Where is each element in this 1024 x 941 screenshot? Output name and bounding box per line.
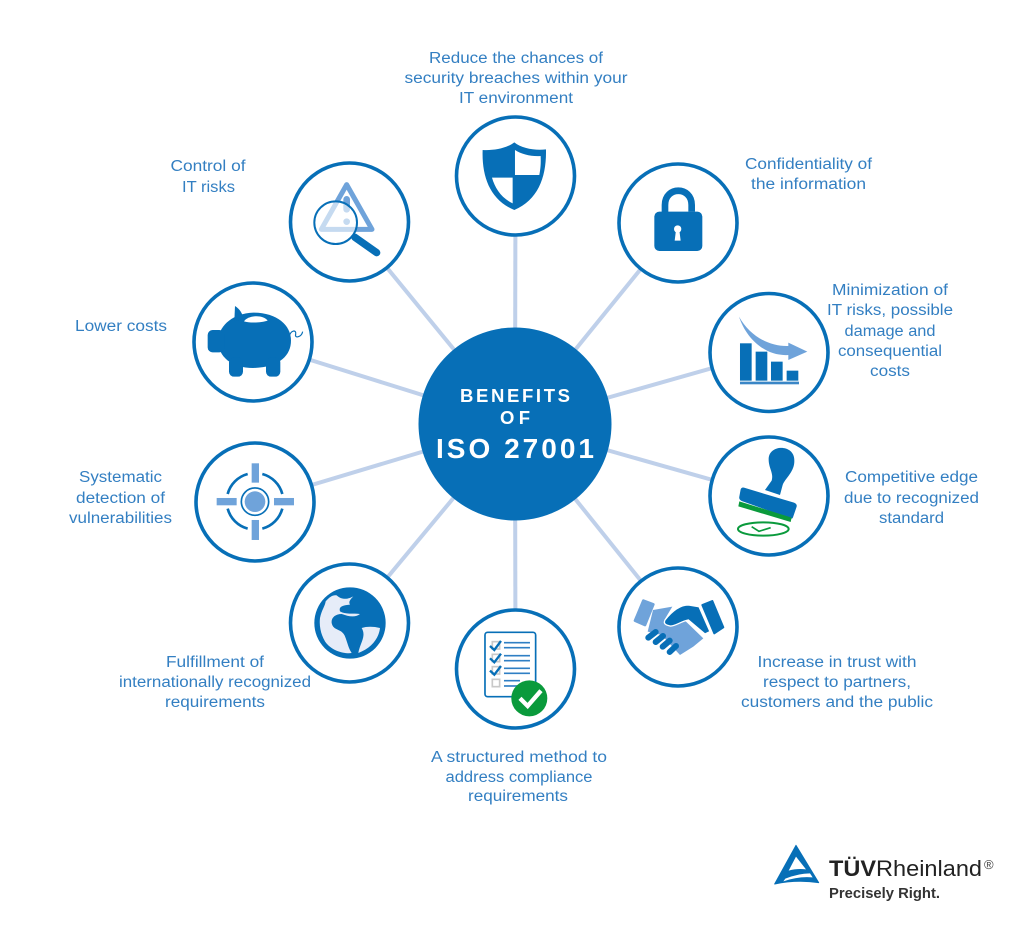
node: handshake icon [619, 568, 737, 686]
logo: TÜV Rheinland: ® [984, 857, 994, 872]
node: falling bar chart icon [710, 294, 828, 412]
label: minimization of IT risks: consequential [838, 343, 942, 360]
label: structured method: requirements [468, 788, 568, 805]
label: minimization of IT risks: Minimization of [832, 282, 949, 299]
label: competitive edge: due to recognized [844, 490, 979, 507]
logo: TÜV Rheinland: Precisely Right. [829, 886, 940, 902]
label: fulfillment of requirements [119, 654, 311, 711]
label: lower costs: Lower costs [75, 318, 167, 335]
label: confidentiality [745, 156, 873, 193]
label: minimization of IT risks [827, 282, 953, 380]
node: piggy bank icon [194, 283, 312, 401]
label: systematic detection: Systematic [79, 469, 162, 486]
label: structured method: A structured method to [431, 749, 607, 766]
label: systematic detection: vulnerabilities [69, 510, 172, 527]
label: competitive edge [844, 469, 979, 527]
label: systematic detection: detection of [76, 490, 166, 507]
label: reduce security breaches: security breaches within your [404, 70, 628, 87]
label: reduce security breaches: IT environment [459, 90, 574, 107]
label: competitive edge: standard [879, 510, 944, 527]
label: control of IT risks: IT risks [182, 179, 235, 196]
central hub: benefits of ISO 27001: BENEFITS [460, 385, 570, 406]
label: fulfillment of requirements: Fulfillment of [166, 654, 265, 671]
label: control of IT risks [170, 158, 246, 196]
label: competitive edge: Competitive edge [845, 469, 978, 486]
connector spokes [253, 176, 769, 669]
node: target crosshair icon [196, 443, 314, 561]
label: minimization of IT risks: IT risks, possible [827, 302, 953, 319]
label: confidentiality: the information [751, 176, 866, 193]
node: warning triangle under magnifier icon [290, 163, 408, 281]
central hub: benefits of ISO 27001: OF [500, 407, 530, 428]
central hub: benefits of ISO 27001: ISO 27001 [436, 433, 594, 464]
logo: TÜV Rheinland [775, 845, 994, 902]
label: increase in trust: Increase in trust with [758, 654, 916, 671]
logo: TÜV Rheinland: TÜVRheinland [829, 856, 982, 881]
label: reduce security breaches: Reduce the chances of [429, 50, 604, 67]
label: fulfillment of requirements: internationally recognized [119, 674, 311, 691]
label: confidentiality: Confidentiality of [745, 156, 873, 173]
label: reduce security breaches [404, 50, 628, 107]
label: fulfillment of requirements: requirements [165, 694, 265, 711]
label: increase in trust [741, 654, 933, 711]
central hub: benefits of ISO 27001 [418, 328, 612, 520]
node: globe icon [290, 564, 408, 682]
label: structured method [431, 749, 607, 805]
label: control of IT risks: Control of [170, 158, 246, 175]
label: minimization of IT risks: costs [870, 363, 910, 380]
label: increase in trust: respect to partners, [763, 674, 911, 691]
label: minimization of IT risks: damage and [844, 323, 936, 340]
label: structured method: address compliance [446, 769, 592, 786]
label: systematic detection [69, 469, 172, 527]
node: stamp icon [710, 437, 828, 555]
node: shield icon [456, 117, 574, 235]
label: increase in trust: customers and the public [741, 694, 933, 711]
node: padlock icon [619, 164, 737, 282]
node: checklist icon [456, 610, 574, 728]
